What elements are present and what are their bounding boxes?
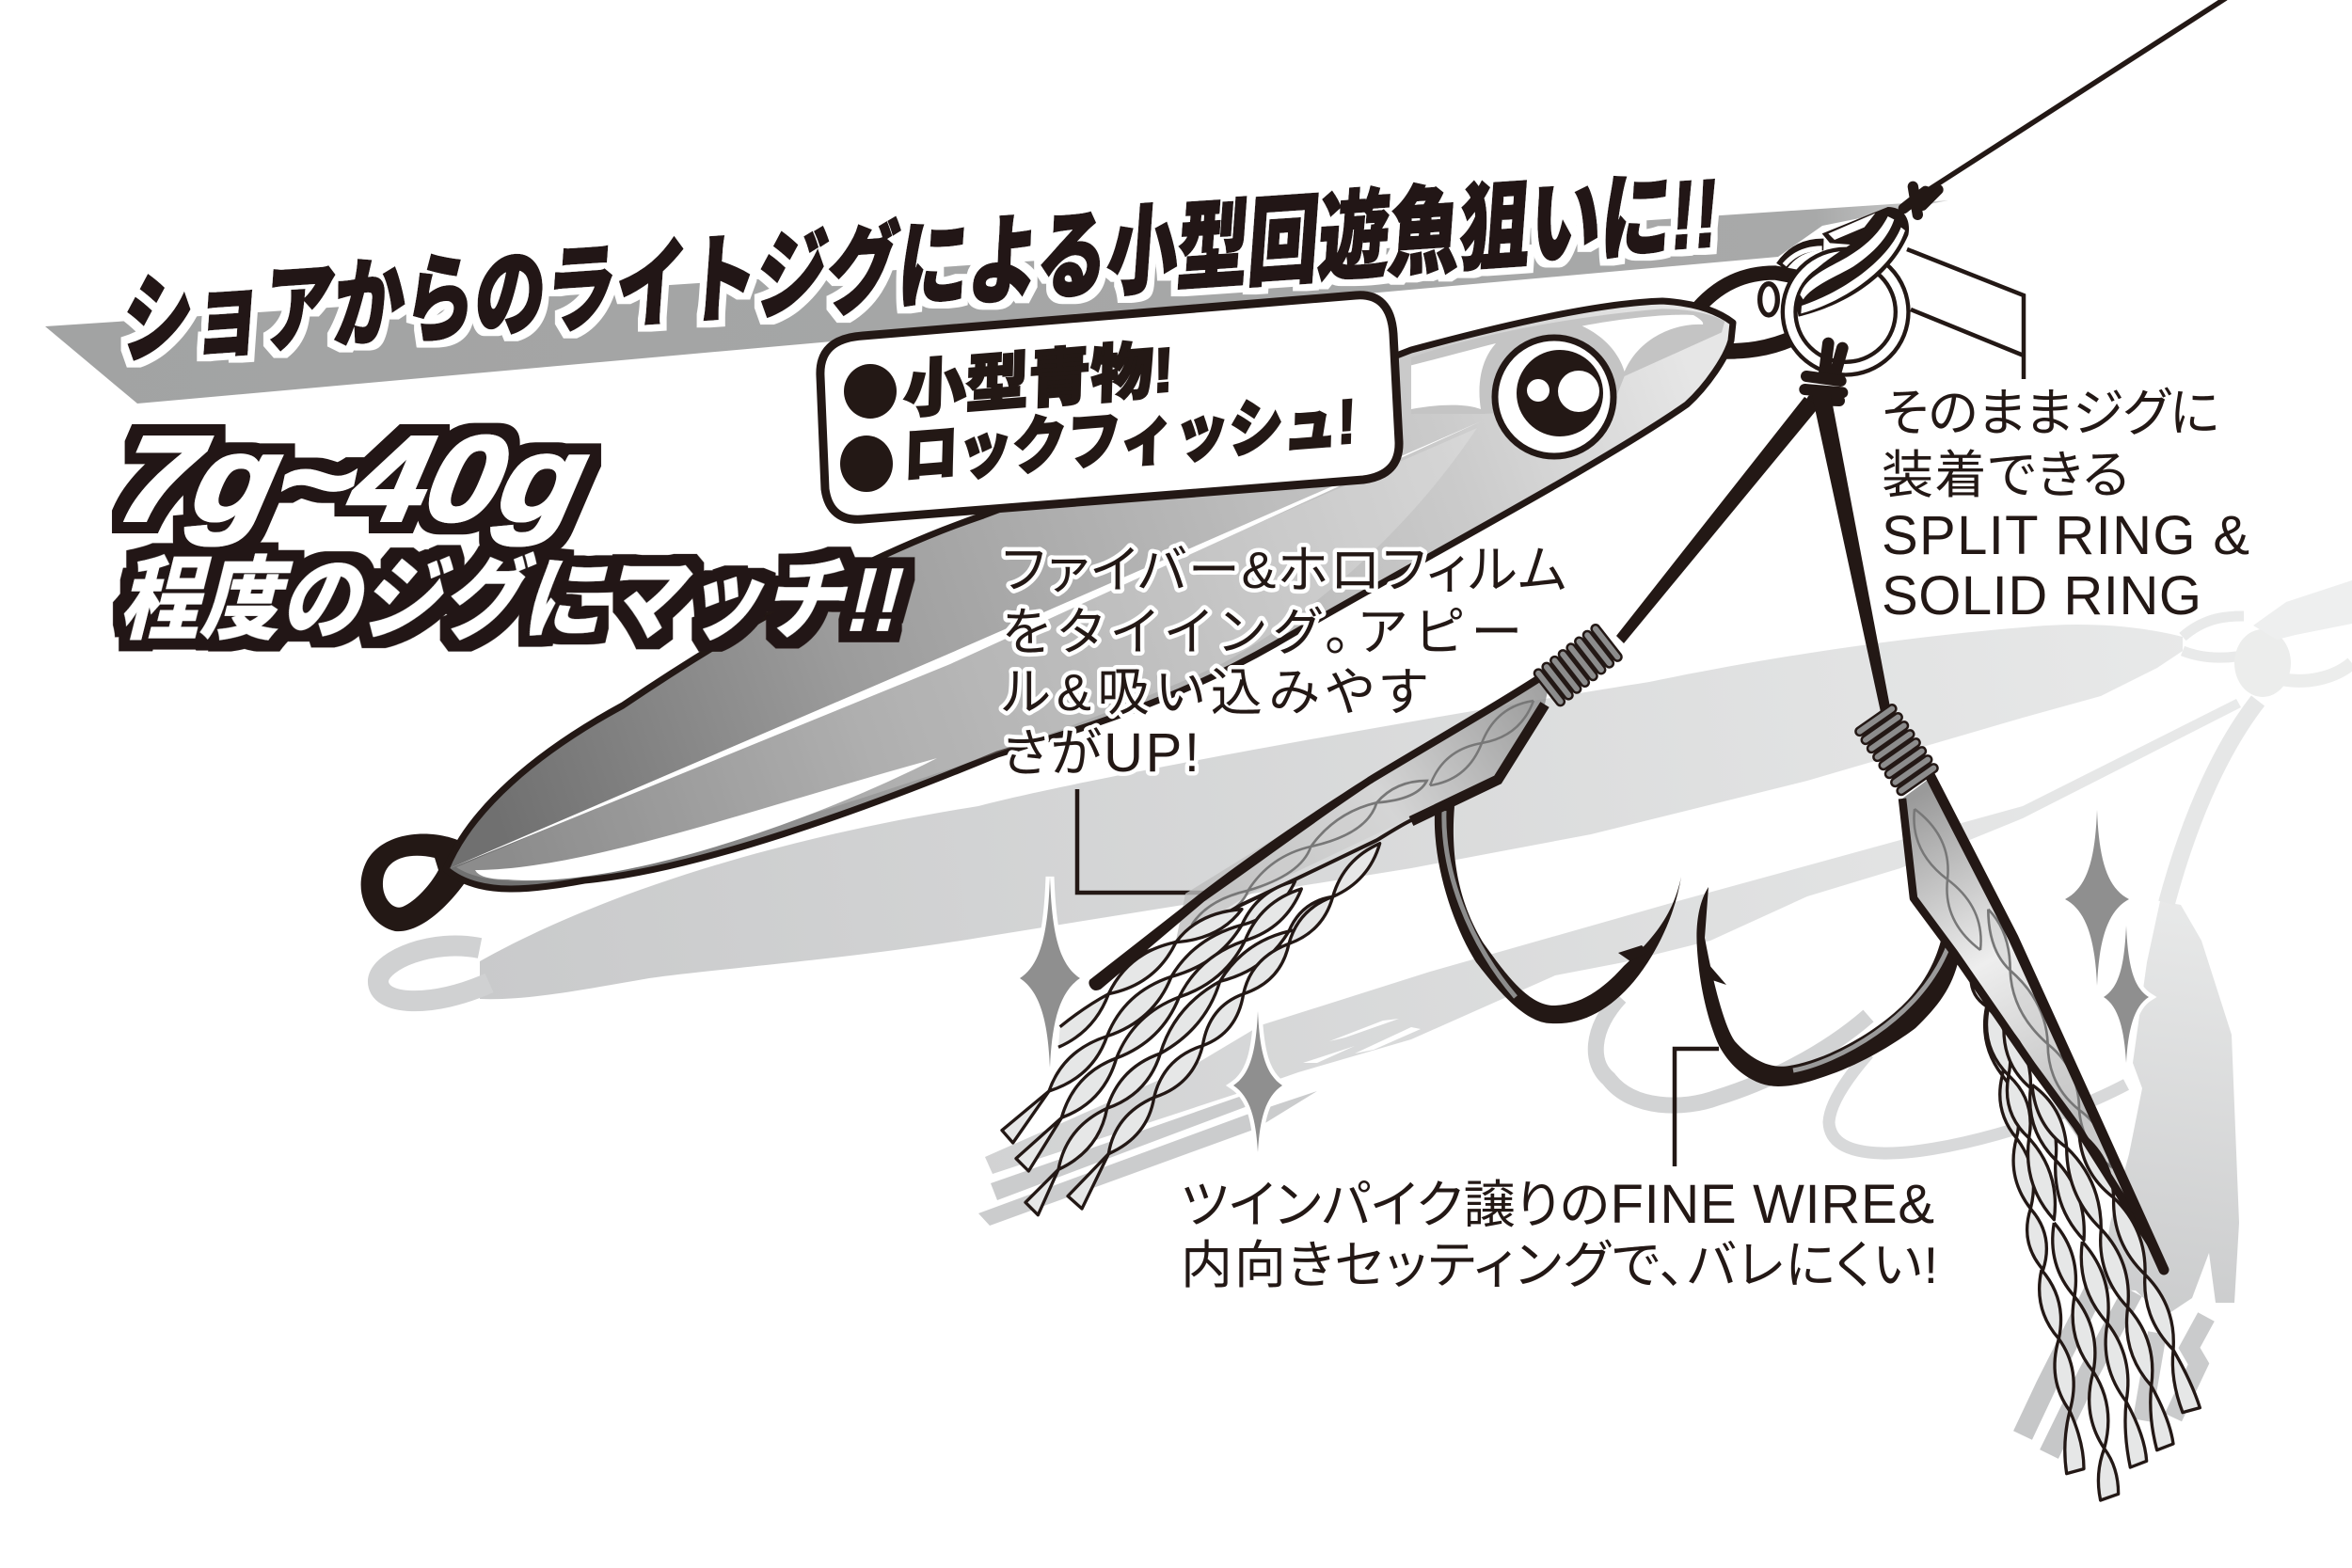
pill text: rockfish: ロックフィッシュ!: [903, 387, 1357, 492]
callout lead: fiber: [1077, 789, 1209, 893]
callout text: rings: 装着できる: [1882, 446, 2129, 504]
icon: left thread wrap: [1538, 628, 1617, 702]
right fly: outline lines: [1902, 764, 2164, 1270]
film outline: [1411, 705, 1545, 821]
callout text: fine wire: [1181, 1174, 1938, 1294]
fly back line: [1370, 670, 1552, 781]
callout text: fiber and holo film: ファイバー&ホロフィルム: [1002, 541, 1566, 599]
main line: [1911, 0, 2226, 201]
right fly: fiber net, lower and tails: [2040, 1223, 2200, 1500]
strand chains: [1002, 844, 1380, 1215]
icon: right thread wrap: [1860, 709, 1933, 791]
callout text: fiber and holo film: [1002, 541, 1566, 784]
icon: sparkle centre: [1233, 1011, 1282, 1152]
hook barb: [1708, 964, 1726, 985]
shadow: jig, hooks and flies: [378, 580, 2352, 1454]
callout text: fiber and holo film: をタイイング。アピー: [1002, 603, 1522, 661]
heading: weight range and jig match: 7g~40g: [109, 412, 598, 546]
right hook: [1696, 887, 1959, 1086]
heading: weight range and jig match: [109, 412, 916, 651]
title: white-halo headline: ショアからのライトジグによる小型回遊魚狙いに!!: [119, 158, 1723, 375]
hook highlight: [1793, 946, 1948, 1070]
left hook: [1435, 806, 1681, 1023]
banner: grey perspective stripe: [45, 200, 1948, 404]
jig highlight: belly: [475, 758, 937, 880]
callout text: fine wire: 内向きセッティングで、バレにくい!: [1181, 1236, 1938, 1294]
callout text: fiber and holo film: さがUP!: [1002, 722, 1200, 784]
icon: sparkle left: [1020, 877, 1080, 1068]
heading: weight range and jig match: 程度のジグにマッチ!!: [114, 549, 916, 651]
callout lead: wire: [1675, 1049, 1719, 1166]
jig head shading and highlights: [1411, 309, 1724, 414]
assist lines: [1616, 395, 1891, 712]
jig body: [446, 301, 1733, 889]
film strands, grey: [1192, 781, 1427, 925]
hook barb: [1618, 945, 1648, 961]
icon: jig tail ring: [361, 833, 473, 931]
callout text: fine wire: ツインパイク譲りのFINE WIRE&: [1181, 1174, 1934, 1235]
jig highlight: centre ridge: [448, 421, 1481, 869]
fly thick line: [1089, 778, 1374, 990]
right fly: holo film: [1902, 777, 2164, 1272]
icon: bullet 1: [844, 364, 897, 419]
icon: eyelet ring at jig nose: [1693, 273, 1795, 351]
jig lighter belly tone: [456, 428, 1477, 881]
callout text: rings: SOLID RING: [1882, 565, 2201, 626]
callout lead: rings: [1907, 249, 2024, 379]
panel: target fish pill: [820, 295, 1399, 519]
film strands, grey: [1988, 910, 2110, 1166]
right fly: fiber net, upper: [1971, 978, 2145, 1275]
pill text: small yellowtail: 小型青物!: [903, 335, 1175, 426]
film lower line: [1129, 812, 1430, 958]
icon: ring assembly (link, solid ring, split ring, knots): [1781, 186, 1938, 401]
callout text: rings: そのままジグに: [1882, 384, 2219, 442]
callout text: rings: SPLIT RING &: [1882, 505, 2249, 566]
hook highlight: [1444, 811, 1516, 997]
icon: jig eye: [1495, 338, 1613, 456]
callout text: rings: [1882, 384, 2249, 626]
callout text: fiber and holo film: ル&吸い込みやす: [1002, 663, 1427, 721]
icon: bullet 2: [840, 436, 893, 492]
icon: sparkle right lower: [2104, 926, 2149, 1063]
left fly: holo film: [1176, 670, 1552, 941]
icon: sparkle right upper: [2065, 810, 2129, 986]
left fly: fiber net and tails: [1002, 778, 1430, 1215]
